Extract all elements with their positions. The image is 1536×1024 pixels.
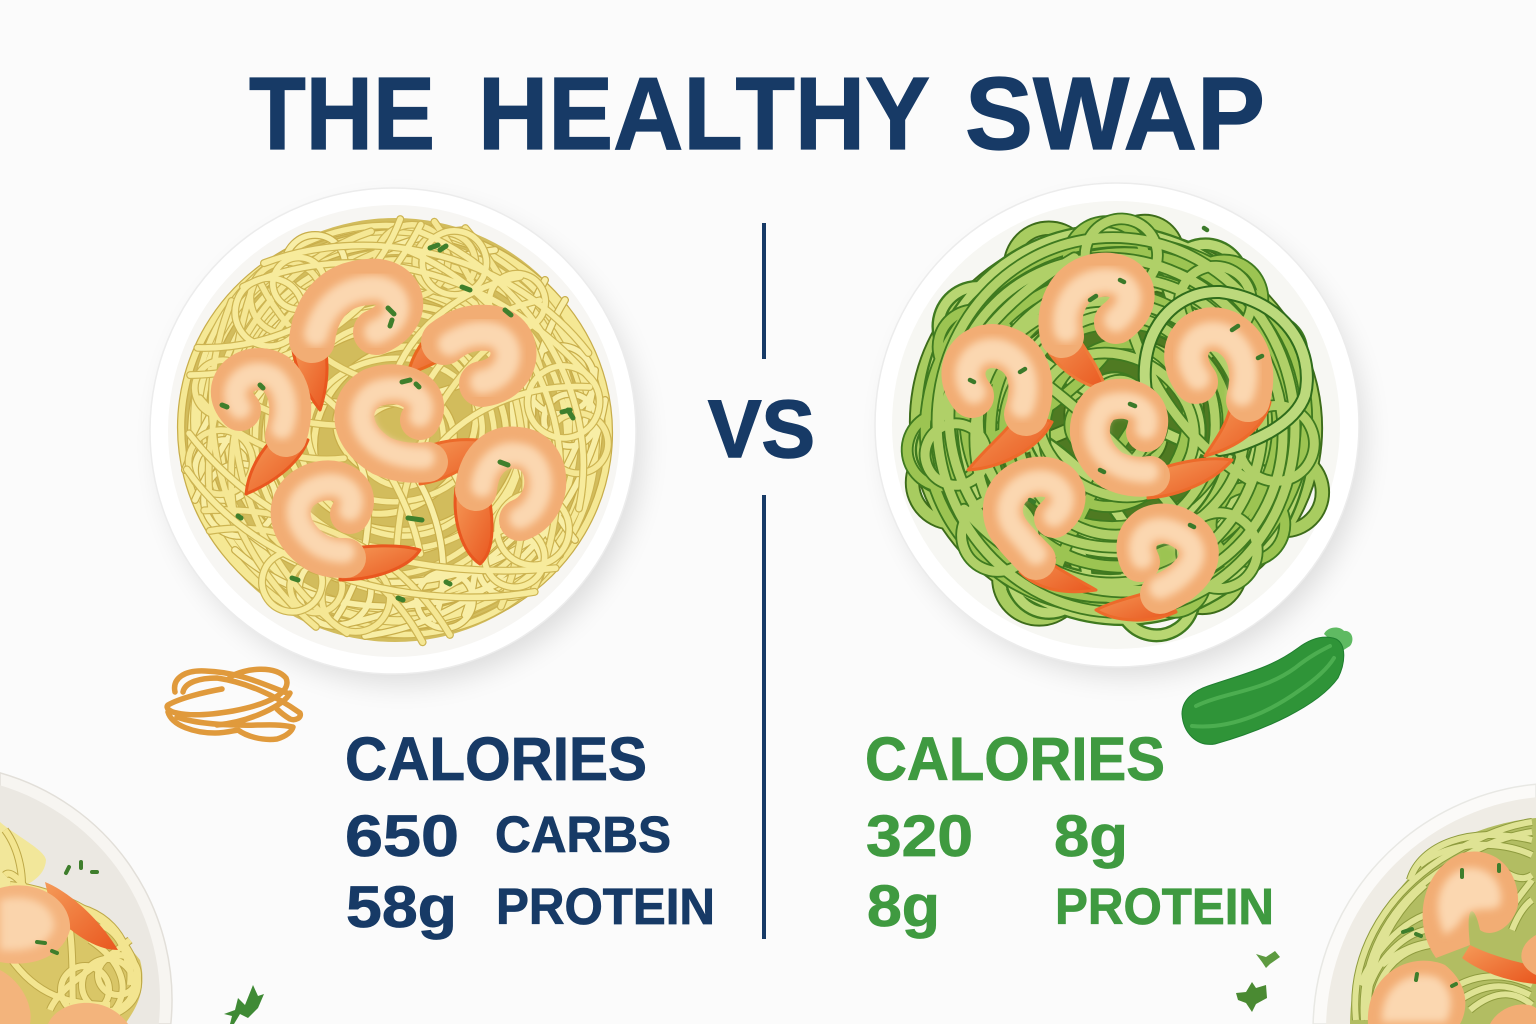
corner dish: bottom left <box>0 773 172 1024</box>
bowl shadow <box>888 200 1364 676</box>
garnish: parsley bottom left <box>224 985 264 1024</box>
shrimp: bottom <box>1096 524 1199 620</box>
lower shrimp <box>1368 961 1465 1024</box>
panel: zucchini noodle bowl <box>794 102 1438 748</box>
bowl shadow <box>162 204 642 684</box>
white bowl <box>875 183 1359 667</box>
spaghetti <box>30 65 760 795</box>
divider: lower <box>762 495 766 939</box>
shrimp: centre <box>354 384 492 484</box>
icon: zucchini <box>1182 628 1352 744</box>
calories value: 650 <box>345 804 459 869</box>
main highlight <box>1438 868 1501 935</box>
shrimp: lower left <box>1003 477 1096 592</box>
zucchini stem <box>1324 628 1352 651</box>
protein label: PROTEIN <box>496 878 715 935</box>
zucchini body <box>1182 637 1344 744</box>
main body <box>1423 852 1518 958</box>
title <box>249 56 1265 171</box>
shrimp: right <box>1186 329 1270 456</box>
protein label: PROTEIN <box>1055 878 1274 935</box>
bowl inner well <box>168 205 620 657</box>
shrimp: top <box>292 282 400 410</box>
shrimp: upper right <box>408 325 514 384</box>
tail <box>1462 945 1536 984</box>
panel: pasta bowl <box>30 65 760 795</box>
title: THE <box>249 56 435 171</box>
bowl inner well <box>892 201 1340 649</box>
zucchini noodles <box>794 102 1438 748</box>
shrimp: centre <box>1090 399 1232 498</box>
edge shrimp <box>1490 1004 1536 1024</box>
zucchini highlights <box>1196 646 1330 706</box>
lower left shrimp <box>0 970 31 1024</box>
calories label: CALORIES <box>865 725 1165 793</box>
food base <box>1350 818 1536 1024</box>
parsley flecks <box>222 245 573 600</box>
lemon butter <box>0 822 46 892</box>
noodles <box>1355 822 1532 1020</box>
tail <box>45 882 118 950</box>
VS label: VS <box>708 384 815 475</box>
shrimp <box>1368 852 1536 1024</box>
shrimp: left <box>232 369 308 494</box>
plate surface <box>0 785 160 1024</box>
carbs value: 58g <box>346 875 457 940</box>
body highlight <box>0 898 54 950</box>
stats: pasta <box>345 725 715 940</box>
plate surface <box>1326 797 1536 1024</box>
shrimp: top <box>1042 275 1133 390</box>
calories value: 320 <box>866 804 973 869</box>
right shrimp <box>1521 935 1536 975</box>
food base <box>0 918 142 1024</box>
lower centre shrimp <box>48 1003 128 1024</box>
carbs value: 8g <box>1054 804 1128 869</box>
calories label: CALORIES <box>345 725 647 793</box>
body <box>0 885 70 964</box>
carbs label: CARBS <box>495 806 671 863</box>
shrimp: left <box>963 346 1052 470</box>
parsley flecks <box>970 228 1262 527</box>
plate rim <box>1313 784 1536 1024</box>
shrimp <box>0 882 128 1024</box>
parsley flecks <box>37 862 97 953</box>
corner dish: bottom right <box>1313 784 1536 1024</box>
title: HEALTHY <box>478 56 930 171</box>
white bowl <box>150 188 636 674</box>
large zucchini ribbon loop <box>1145 292 1307 450</box>
spaghetti <box>5 830 138 1018</box>
lower highlight <box>1382 975 1451 1022</box>
icon: spaghetti nest <box>167 669 300 739</box>
garnish: parsley small <box>1256 951 1280 968</box>
divider: upper <box>762 223 766 359</box>
stats: zucchini <box>865 725 1274 939</box>
garnish: parsley bottom right <box>1236 982 1267 1012</box>
parsley flecks <box>1403 865 1499 986</box>
shrimp: bottom <box>291 480 420 580</box>
plate rim <box>0 773 172 1024</box>
shrimp: lower right <box>455 447 545 564</box>
protein value: 8g <box>867 874 940 939</box>
title: SWAP <box>965 56 1265 171</box>
